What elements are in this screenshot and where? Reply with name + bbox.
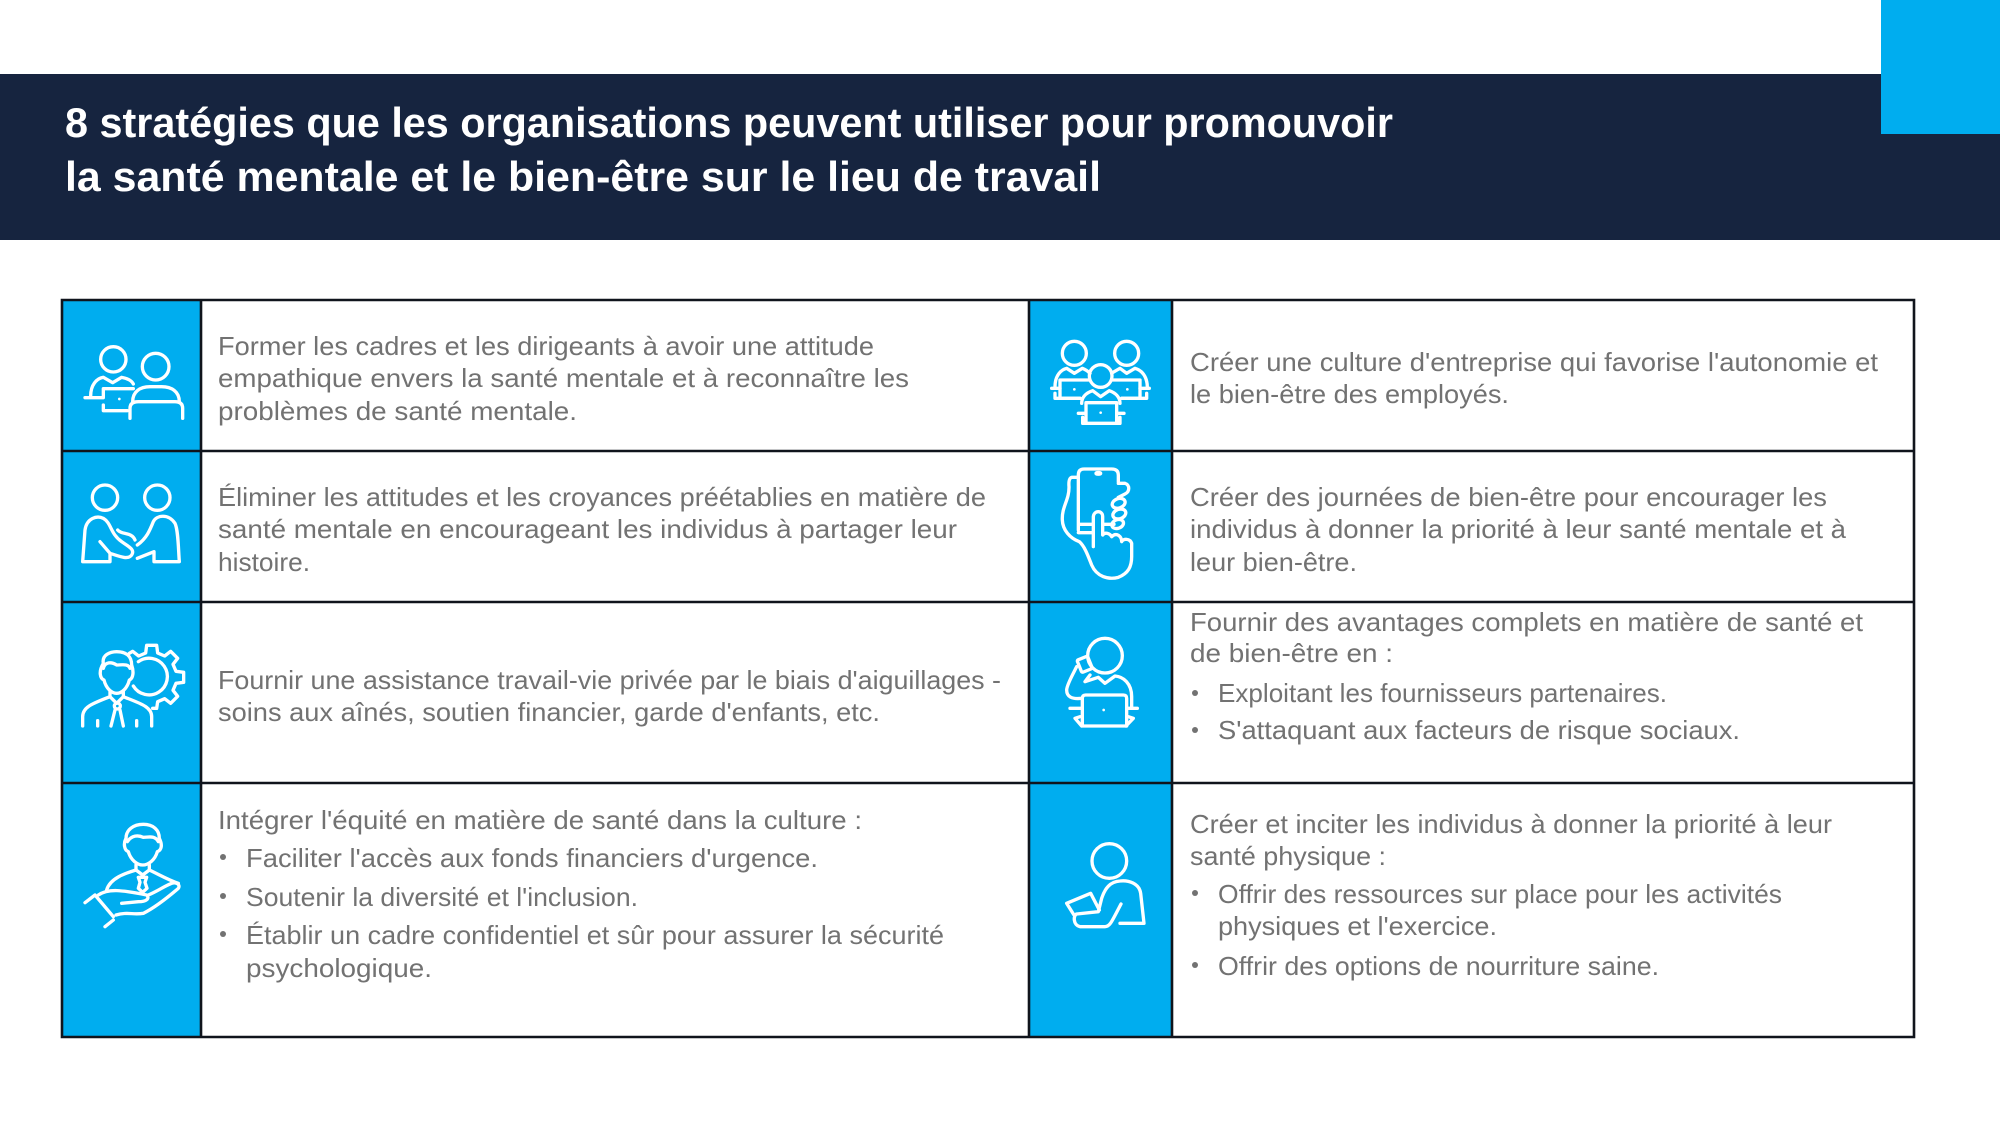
text: work-life assistance: Fournir une assistance travail-vie privée par le biais d'aiguillages - (218, 665, 1001, 695)
text: wellness days (1190, 482, 1847, 577)
title (65, 99, 1393, 200)
text: physical health list: santé physique : (1190, 841, 1386, 871)
text: train managers (218, 331, 909, 426)
text: health equity list: psychologique. (246, 953, 432, 983)
text: work-life assistance (218, 665, 1001, 727)
text: remove preconceptions (218, 482, 986, 577)
text: complete benefits list: de bien-être en : (1190, 638, 1393, 668)
text: train managers: empathique envers la santé mentale et à reconnaître les (218, 363, 909, 393)
strategy table (62, 300, 1914, 1037)
text: complete benefits list: Exploitant les fournisseurs partenaires. (1218, 678, 1667, 708)
title: 8 stratégies que les organisations peuvent utiliser pour promouvoir (65, 99, 1393, 146)
text: health equity list: Soutenir la diversité et l'inclusion. (246, 882, 638, 912)
text: company culture (1190, 347, 1879, 409)
icon: manager and employee at laptop (85, 347, 183, 418)
text: physical health list: Offrir des options de nourriture saine. (1218, 951, 1659, 981)
icon: team at laptops (1052, 341, 1149, 423)
icon: person on phone at laptop (1067, 638, 1137, 726)
accent square (1881, 0, 2000, 134)
text: remove preconceptions: Éliminer les attitudes et les croyances préétablies en matière de (218, 482, 986, 512)
text: train managers: problèmes de santé mentale. (218, 396, 577, 426)
icon: person reading (1067, 844, 1144, 927)
text: physical health list (1190, 809, 1832, 981)
text: physical health list: physiques et l'exercice. (1218, 911, 1497, 941)
text: train managers: Former les cadres et les dirigeants à avoir une attitude (218, 331, 874, 361)
text: wellness days: leur bien-être. (1190, 547, 1357, 577)
text: physical health list: Offrir des ressources sur place pour les activités (1218, 879, 1782, 909)
text: health equity list: Intégrer l'équité en matière de santé dans la culture : (218, 805, 862, 835)
icon: person with gear (83, 645, 184, 726)
text: wellness days: Créer des journées de bien-être pour encourager les (1190, 482, 1827, 512)
text: remove preconceptions: santé mentale en encourageant les individus à partager leur (218, 514, 957, 544)
text: complete benefits list (1190, 607, 1864, 745)
text: complete benefits list: S'attaquant aux facteurs de risque sociaux. (1218, 715, 1740, 745)
text: remove preconceptions: histoire. (218, 547, 310, 577)
icon: two people shaking hands (83, 485, 179, 562)
text: health equity list (218, 805, 944, 983)
icon: person held in a hand (85, 824, 179, 927)
header band (0, 74, 2000, 240)
text: company culture: le bien-être des employés. (1190, 379, 1509, 409)
text: physical health list: Créer et inciter les individus à donner la priorité à leur (1190, 809, 1832, 839)
title: la santé mentale et le bien-être sur le lieu de travail (65, 153, 1101, 200)
text: complete benefits list: Fournir des avantages complets en matière de santé et (1190, 607, 1864, 637)
text: wellness days: individus à donner la priorité à leur santé mentale et à (1190, 514, 1847, 544)
icon: hand tapping smartphone (1062, 469, 1132, 578)
text: company culture: Créer une culture d'entreprise qui favorise l'autonomie et (1190, 347, 1879, 377)
text: health equity list: Faciliter l'accès aux fonds financiers d'urgence. (246, 843, 818, 873)
text: work-life assistance: soins aux aînés, soutien financier, garde d'enfants, etc. (218, 697, 880, 727)
text: health equity list: Établir un cadre confidentiel et sûr pour assurer la sécurité (246, 920, 944, 950)
